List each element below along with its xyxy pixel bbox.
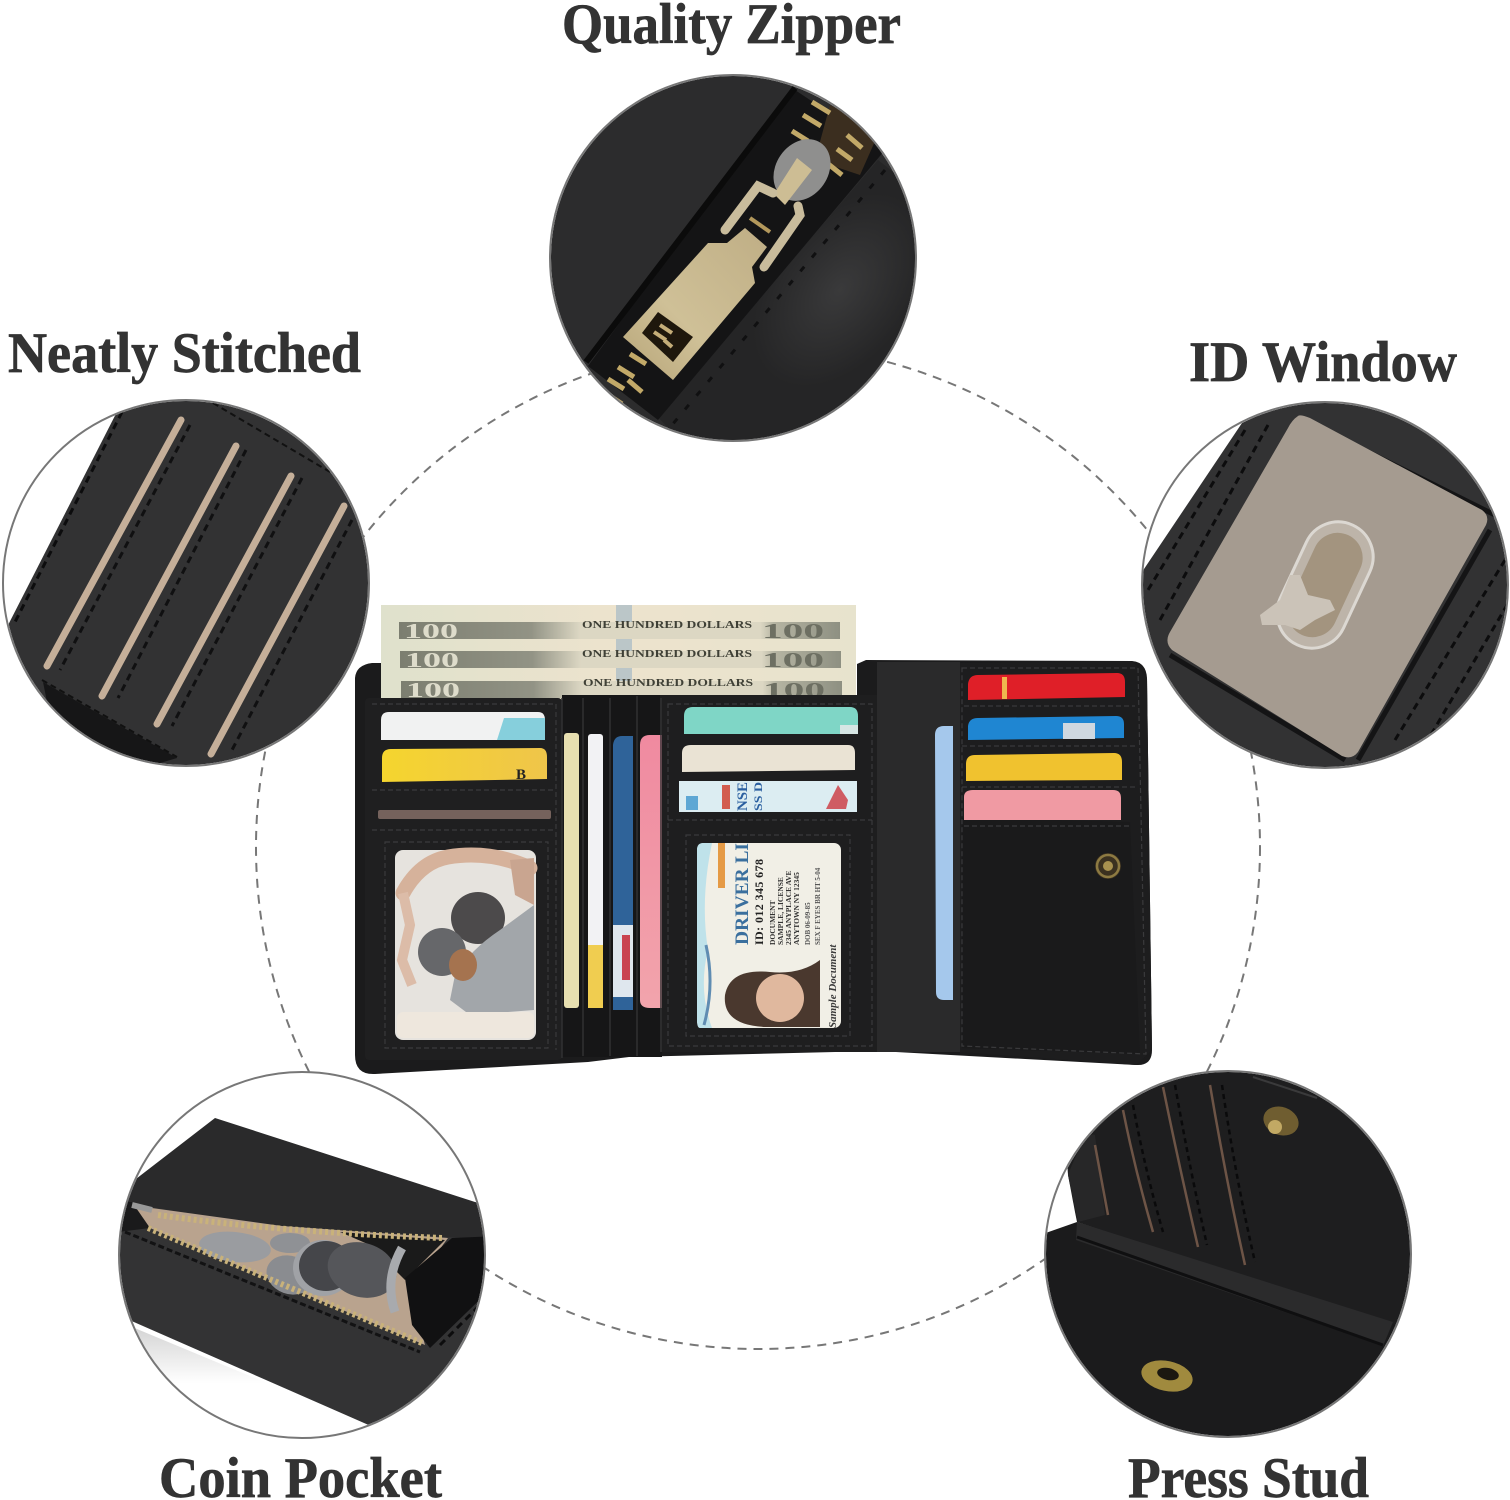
banknotes: ONE HUNDRED DOLLARS bbox=[582, 649, 753, 660]
wallet back and body bbox=[355, 660, 1152, 1074]
vertical slot cards bbox=[564, 726, 953, 1010]
left cards: B bbox=[516, 767, 526, 783]
detail circle: quality zipper bbox=[549, 74, 917, 442]
driver licence window: 2345 ANYPLACE AVE bbox=[784, 871, 793, 945]
left panel bbox=[365, 698, 562, 1060]
zipper tape bbox=[588, 88, 885, 420]
lower body bbox=[120, 1196, 484, 1424]
heading: ID Window: ID Window bbox=[1189, 331, 1457, 394]
middle cards: NSE bbox=[735, 782, 751, 811]
driver licence window: SAMPLE, LICENSE bbox=[776, 877, 785, 945]
left panel stitching bbox=[372, 704, 556, 1050]
driver licence window: Sample Document bbox=[827, 944, 839, 1028]
banknotes: 100 bbox=[763, 678, 825, 702]
driver licence window: DOCUMENT bbox=[768, 900, 777, 945]
banknotes: 100 bbox=[762, 648, 824, 672]
banknotes: 100 bbox=[762, 619, 824, 643]
left cards bbox=[378, 712, 551, 819]
photo window bbox=[395, 850, 536, 1040]
card slots bbox=[47, 420, 344, 754]
zipper teeth bbox=[608, 102, 862, 404]
top flap bbox=[118, 1118, 500, 1240]
driver licence window: DRIVER LI bbox=[732, 843, 753, 945]
banknotes: 100 bbox=[404, 619, 458, 643]
heading: Neatly Stitched: Neatly Stitched bbox=[8, 322, 361, 385]
zipper slider bbox=[623, 128, 842, 380]
middle cards bbox=[679, 707, 858, 812]
driver licence window bbox=[697, 843, 841, 1028]
detail circle: coin pocket bbox=[118, 1072, 500, 1452]
slot strips bbox=[562, 695, 662, 1057]
detail circle: press stud bbox=[1040, 1060, 1420, 1445]
coins bbox=[198, 1228, 404, 1312]
banknotes: 100 bbox=[405, 648, 459, 672]
card slots bbox=[1095, 1085, 1245, 1265]
pocket interior bbox=[130, 1205, 448, 1345]
right cards bbox=[964, 673, 1125, 820]
middle panel stitching bbox=[668, 704, 872, 1046]
banknotes bbox=[381, 605, 856, 702]
driver licence window: ID: 012 345 678 bbox=[752, 859, 766, 945]
driver licence window: ANYTOWN NY 12345 bbox=[792, 872, 801, 945]
driver licence window: DOB 06-09-85 bbox=[804, 902, 812, 945]
stud bottom bbox=[1141, 1360, 1193, 1392]
dashed connecting ring bbox=[256, 345, 1260, 1349]
id window tab bbox=[1260, 520, 1375, 650]
right panel stitching bbox=[962, 668, 1146, 1054]
detail circle: neatly stitched bbox=[3, 400, 369, 766]
middle panel bbox=[660, 695, 877, 1052]
banknotes: ONE HUNDRED DOLLARS bbox=[583, 678, 754, 689]
banknotes: ONE HUNDRED DOLLARS bbox=[582, 620, 753, 631]
slot divider lines bbox=[562, 696, 661, 1058]
detail circle: ID window bbox=[1142, 400, 1510, 770]
leather centre strip bbox=[877, 662, 960, 1052]
wallet snap button bbox=[1095, 853, 1121, 879]
middle cards: SS D bbox=[751, 782, 765, 811]
shadow bbox=[136, 1328, 240, 1372]
stud top bbox=[1263, 1106, 1299, 1136]
zipper teeth bbox=[158, 1215, 442, 1238]
central wallet bbox=[355, 605, 1152, 1074]
right panel bbox=[960, 661, 1152, 1065]
driver licence window: SEX F EYES BR HT 5-04 bbox=[814, 867, 822, 945]
banknotes: 100 bbox=[406, 678, 460, 702]
